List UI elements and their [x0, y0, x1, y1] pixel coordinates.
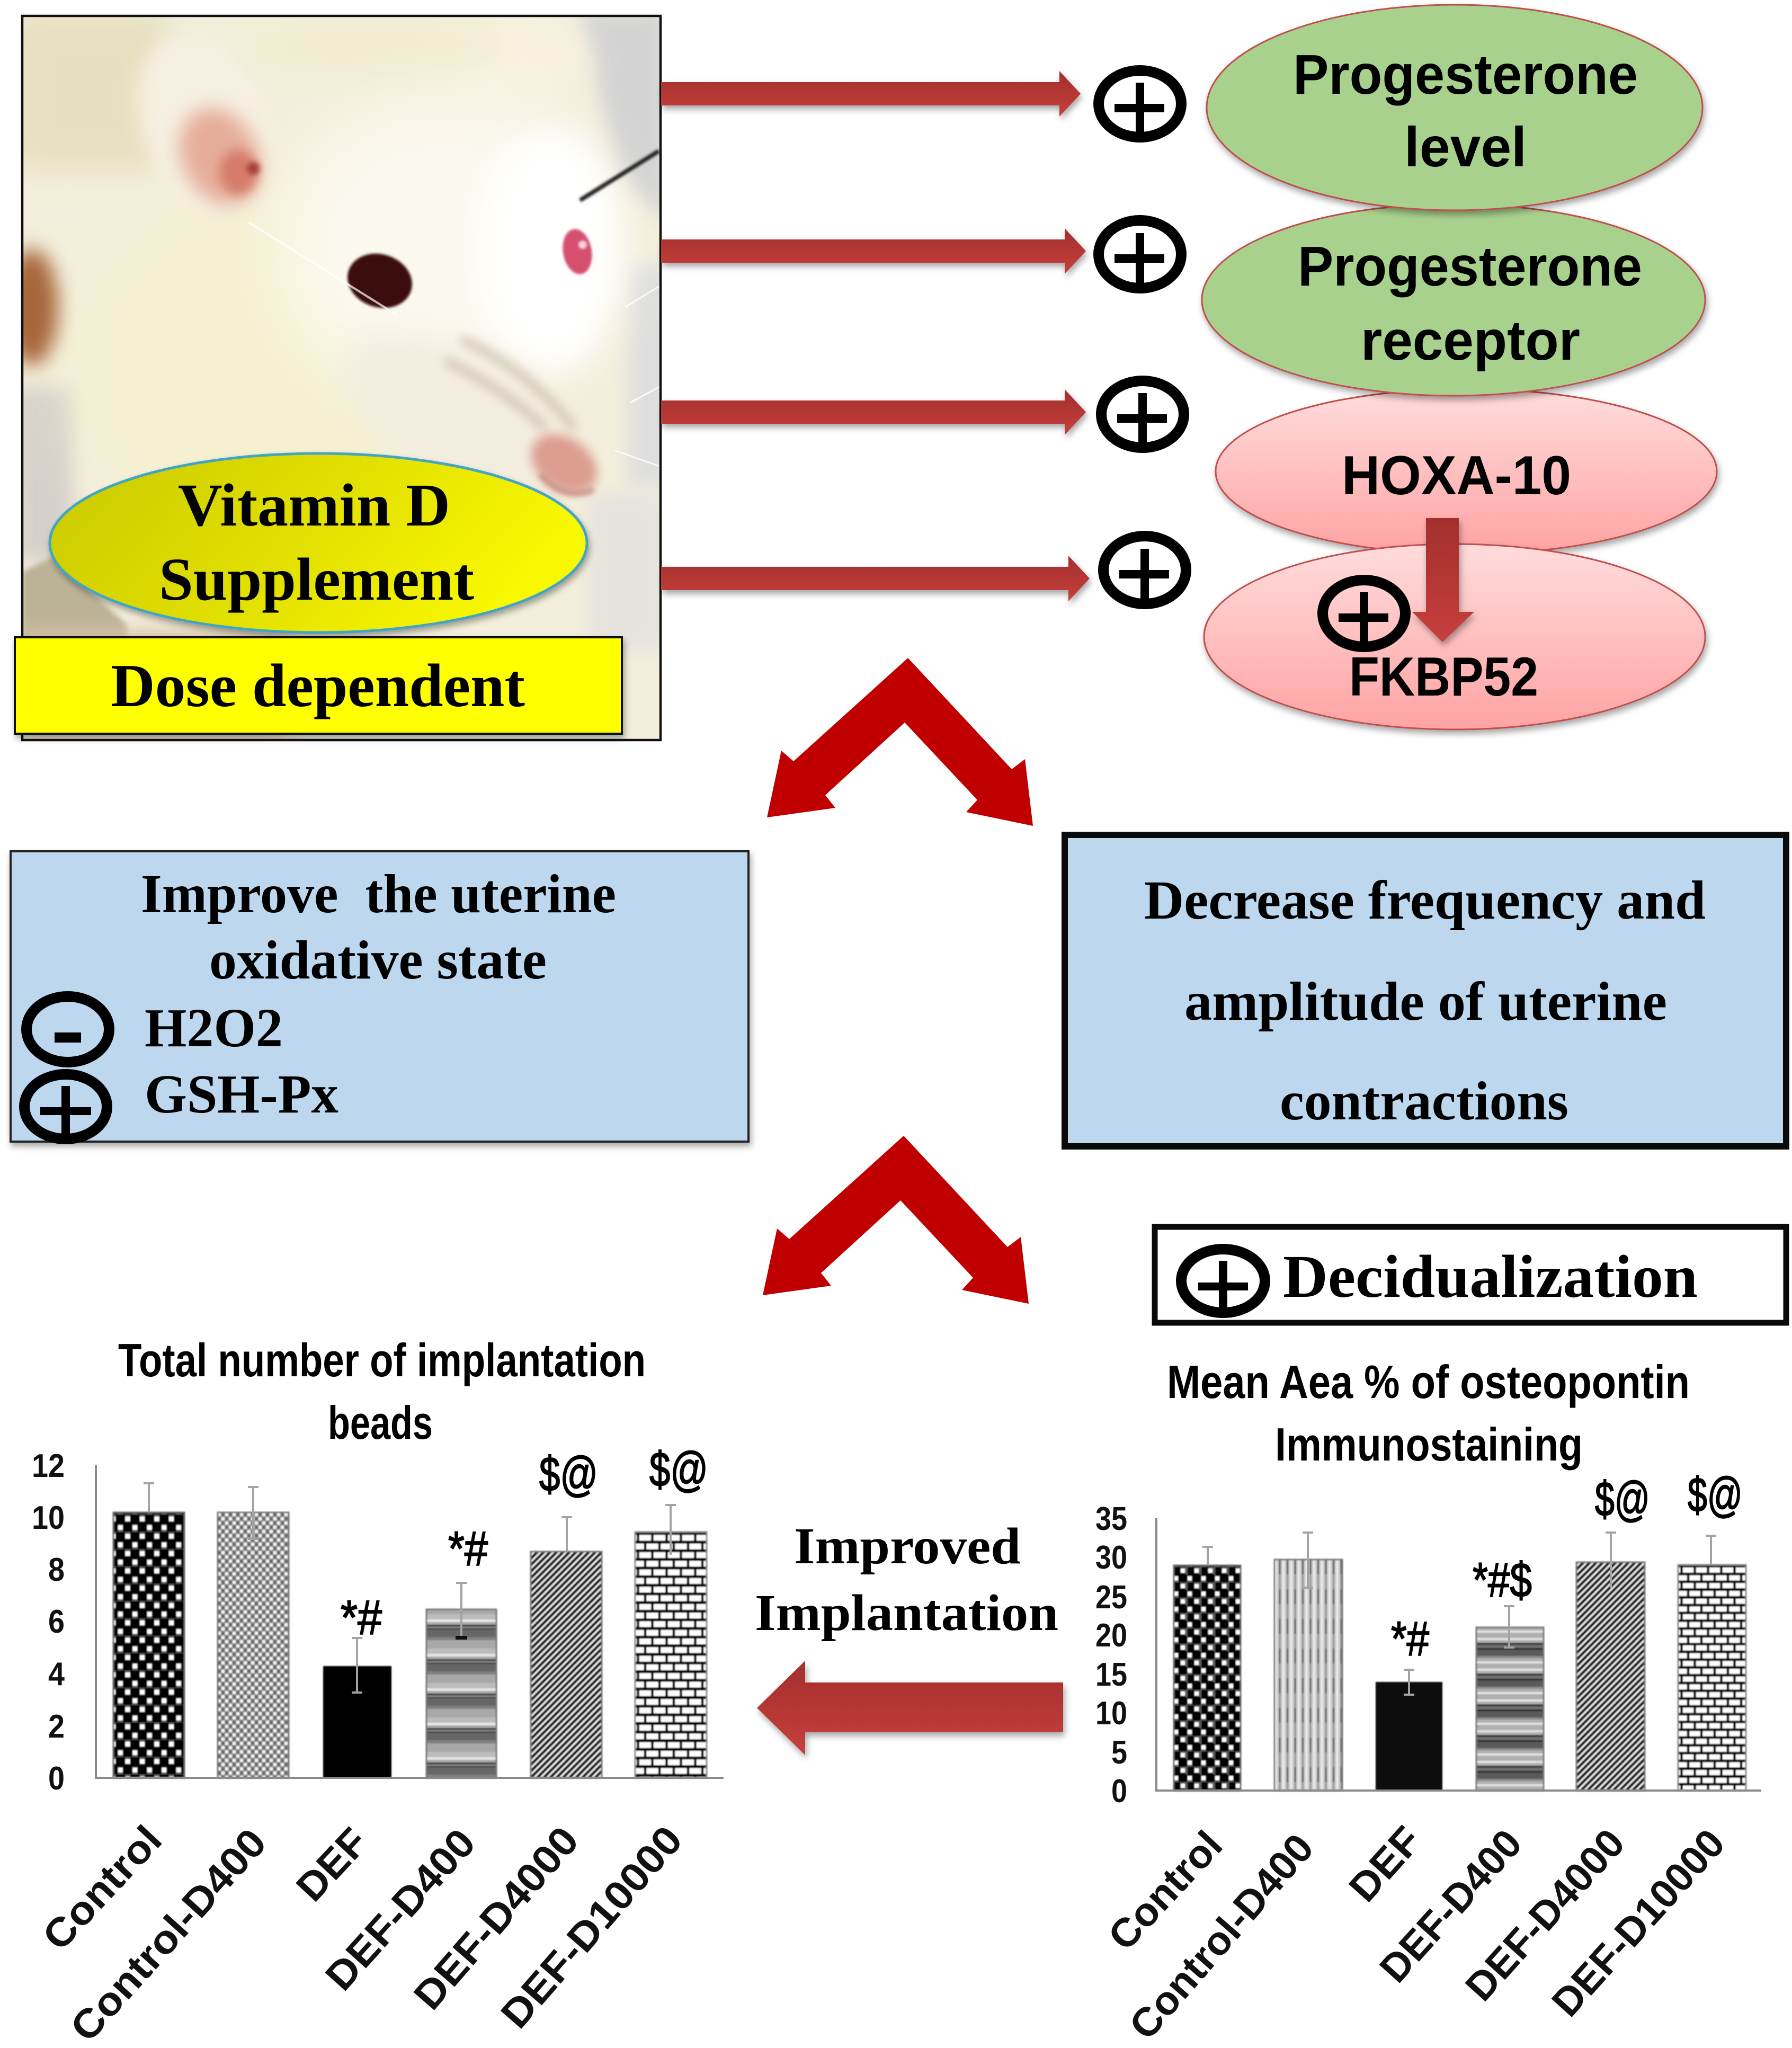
y axis labels: 25 — [1095, 1579, 1127, 1616]
ellipse: progesterone receptor: receptor — [1361, 309, 1580, 372]
significance markers: *# — [1391, 1612, 1429, 1666]
icon: plus — [24, 1074, 107, 1139]
y axis labels: 5 — [1111, 1734, 1127, 1771]
arrow: photo to progesterone receptor — [661, 228, 1086, 274]
x axis labels: DEF — [1340, 1818, 1430, 1911]
panel: uterine contractions: Decrease frequency and — [1144, 870, 1706, 931]
y axis labels — [1095, 1501, 1127, 1810]
x axis labels: DEF-D4000 — [1457, 1820, 1634, 2010]
ellipse: progesterone receptor — [1202, 204, 1705, 396]
text: GSH-Px: GSH-Px — [145, 1064, 338, 1125]
icon: minus — [26, 996, 109, 1062]
bars — [1174, 1560, 1746, 1791]
panel: decidualization: Decidualization — [1283, 1243, 1698, 1310]
heading: improve oxidative state — [141, 863, 616, 991]
dose dependent label — [15, 637, 622, 734]
panel: uterine contractions: contractions — [1280, 1071, 1568, 1132]
photo frame — [22, 16, 661, 740]
significance markers: *#$ — [1473, 1553, 1532, 1607]
vitamin D ellipse: Vitamin D — [178, 471, 450, 539]
x axis labels: DEF-D10000 — [492, 1818, 691, 2037]
chart title: Mean Aea % of osteopontin — [1167, 1356, 1690, 1408]
chart title: Total number of implantation — [118, 1334, 646, 1386]
significance markers: $@ — [649, 1442, 708, 1497]
chart: total number of implantation beads — [32, 1334, 724, 2048]
ellipse: progesterone level: Progesterone — [1293, 43, 1638, 106]
text: improved implantation: Implantation — [755, 1584, 1058, 1642]
icon: plus 1 — [1099, 70, 1181, 137]
panel: uterine contractions — [1065, 835, 1786, 1146]
y axis labels — [32, 1448, 65, 1797]
icon: plus 2 — [1099, 220, 1181, 288]
icon: plus 3 — [1101, 381, 1184, 448]
error bars — [1202, 1533, 1716, 1695]
x axis labels: DEF — [288, 1819, 377, 1910]
ellipse: HOXA-10: HOXA-10 — [1342, 445, 1571, 506]
x axis labels: DEF-D10000 — [1543, 1821, 1734, 2025]
arrow: photo to FKBP52 — [661, 556, 1090, 601]
arrow: decidualization to implantation — [757, 1661, 1063, 1755]
significance markers — [1391, 1468, 1743, 1666]
text: improved implantation: Improved — [794, 1518, 1021, 1575]
panel: uterine contractions: amplitude of uterine — [1184, 971, 1667, 1032]
vitamin D ellipse — [50, 453, 587, 633]
arrow: photo to progesterone level — [661, 71, 1081, 117]
ellipse: FKBP52: FKBP52 — [1349, 646, 1538, 708]
arrow: lower double-headed chevron — [763, 1136, 1029, 1304]
significance markers — [341, 1442, 708, 1645]
x axis labels: Control — [34, 1817, 171, 1959]
chart title: Immunostaining — [1275, 1418, 1583, 1471]
significance markers: $@ — [539, 1447, 598, 1501]
x axis labels: DEF-D400 — [317, 1820, 484, 1999]
x axis labels: DEF-D4000 — [405, 1818, 587, 2018]
error bar tick — [456, 1636, 467, 1640]
chart title — [1167, 1356, 1690, 1471]
y axis labels: 10 — [32, 1500, 65, 1536]
significance markers: *# — [448, 1522, 488, 1576]
chart title: beads — [328, 1396, 433, 1449]
x axis labels: Control-D400 — [1121, 1826, 1323, 2048]
axes — [96, 1465, 724, 1778]
y axis labels: 4 — [48, 1656, 65, 1693]
y axis labels: 10 — [1095, 1695, 1127, 1732]
error bars — [144, 1483, 676, 1693]
heading: improve oxidative state: Improve the uterine — [141, 863, 616, 924]
significance markers: *# — [341, 1591, 382, 1645]
y axis labels: 0 — [48, 1760, 65, 1797]
x axis labels: Control-D400 — [62, 1820, 275, 2048]
ellipse: FKBP52 — [1204, 544, 1705, 729]
ellipse: progesterone level: level — [1404, 116, 1527, 179]
y axis labels: 30 — [1095, 1539, 1127, 1576]
arrow: HOXA-10 to FKBP52 — [1412, 518, 1474, 642]
significance markers: $@ — [1688, 1468, 1743, 1522]
x axis labels — [1100, 1818, 1734, 2048]
ellipse: progesterone level — [1207, 5, 1702, 210]
y axis labels: 6 — [48, 1604, 65, 1640]
y axis labels: 8 — [48, 1552, 65, 1588]
y axis labels: 0 — [1111, 1773, 1127, 1810]
x axis labels: DEF-D400 — [1371, 1821, 1531, 1991]
axes — [1156, 1518, 1761, 1791]
vitamin D ellipse: Supplement — [159, 546, 474, 613]
bars — [113, 1512, 707, 1778]
y axis labels: 2 — [48, 1708, 65, 1745]
y axis labels: 15 — [1095, 1657, 1127, 1693]
ellipse: HOXA-10 — [1216, 389, 1717, 554]
heading: improve oxidative state: oxidative state — [209, 930, 547, 991]
significance markers: $@ — [1595, 1472, 1650, 1526]
panel: rat photo with vitamin D labels — [5, 11, 670, 740]
ellipse: progesterone receptor: Progesterone — [1298, 235, 1642, 298]
text: H2O2: H2O2 — [145, 998, 283, 1058]
panel: uterine oxidative state — [11, 851, 748, 1142]
icon: plus inside FKBP52 — [1323, 580, 1405, 647]
text: improved implantation — [755, 1518, 1058, 1642]
x axis labels: Control — [1100, 1822, 1231, 1959]
y axis labels: 12 — [32, 1448, 65, 1484]
arrow: photo to HOXA-10 — [661, 389, 1086, 435]
y axis labels: 35 — [1095, 1501, 1127, 1537]
photo: albino rat (illustrated) — [5, 11, 670, 740]
chart: mean area % of osteopontin immunostaining — [1095, 1356, 1761, 2048]
chart title — [118, 1334, 646, 1449]
panel: decidualization — [1155, 1227, 1786, 1323]
dose dependent label: Dose dependent — [111, 652, 525, 720]
icon: plus — [1181, 1249, 1265, 1314]
x axis labels — [34, 1817, 691, 2048]
y axis labels: 20 — [1095, 1617, 1127, 1654]
arrow: upper double-headed chevron — [767, 658, 1033, 826]
icon: plus 4 — [1103, 536, 1186, 604]
